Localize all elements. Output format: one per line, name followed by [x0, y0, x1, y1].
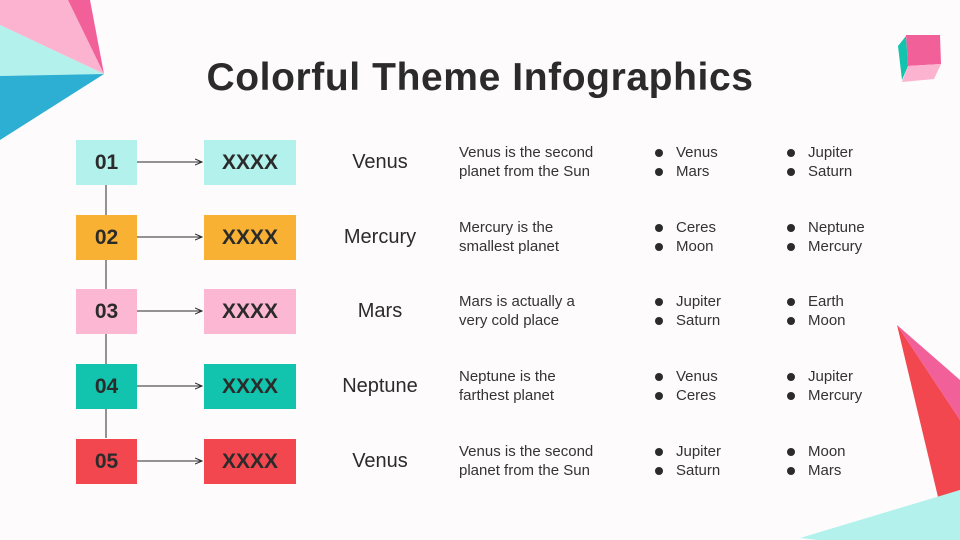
text: Mars is actually a: [459, 293, 575, 310]
row 3: [76, 289, 846, 334]
text: Mercury is the: [459, 219, 553, 236]
text: Mercury: [344, 226, 416, 248]
text: Saturn: [808, 163, 852, 180]
text: Ceres: [676, 219, 716, 236]
text: Venus is the second: [459, 144, 593, 161]
text: Neptune: [342, 375, 418, 397]
text: very cold place: [459, 312, 559, 329]
text: 03: [95, 300, 118, 323]
text: Moon: [676, 238, 714, 255]
text: smallest planet: [459, 238, 559, 255]
text: 04: [95, 375, 118, 398]
text: Mercury: [808, 387, 862, 404]
text: 02: [95, 226, 118, 249]
text: Venus: [352, 450, 408, 472]
text: 01: [95, 151, 118, 174]
text: 05: [95, 450, 118, 473]
text: Venus: [676, 144, 718, 161]
text: planet from the Sun: [459, 462, 590, 479]
text: Jupiter: [676, 443, 721, 460]
text: planet from the Sun: [459, 163, 590, 180]
text: Jupiter: [808, 368, 853, 385]
text: XXXX: [222, 226, 278, 249]
text: Moon: [808, 312, 846, 329]
text: Mars: [358, 300, 402, 322]
row 5: [76, 439, 846, 484]
text: Mars: [676, 163, 709, 180]
text: farthest planet: [459, 387, 554, 404]
text: XXXX: [222, 375, 278, 398]
text: Jupiter: [676, 293, 721, 310]
row 1: [76, 140, 853, 185]
text: Neptune is the: [459, 368, 556, 385]
text: Earth: [808, 293, 844, 310]
text: Venus is the second: [459, 443, 593, 460]
text: XXXX: [222, 450, 278, 473]
text: Mercury: [808, 238, 862, 255]
text: XXXX: [222, 300, 278, 323]
title: Colorful Theme Infographics: [206, 56, 754, 99]
text: Jupiter: [808, 144, 853, 161]
text: Mars: [808, 462, 841, 479]
text: XXXX: [222, 151, 278, 174]
text: Moon: [808, 443, 846, 460]
text: Saturn: [676, 312, 720, 329]
text: Ceres: [676, 387, 716, 404]
text: Venus: [352, 151, 408, 173]
row 4: [76, 364, 862, 409]
row 2: [76, 215, 865, 260]
text: Saturn: [676, 462, 720, 479]
text: Neptune: [808, 219, 865, 236]
text: Venus: [676, 368, 718, 385]
